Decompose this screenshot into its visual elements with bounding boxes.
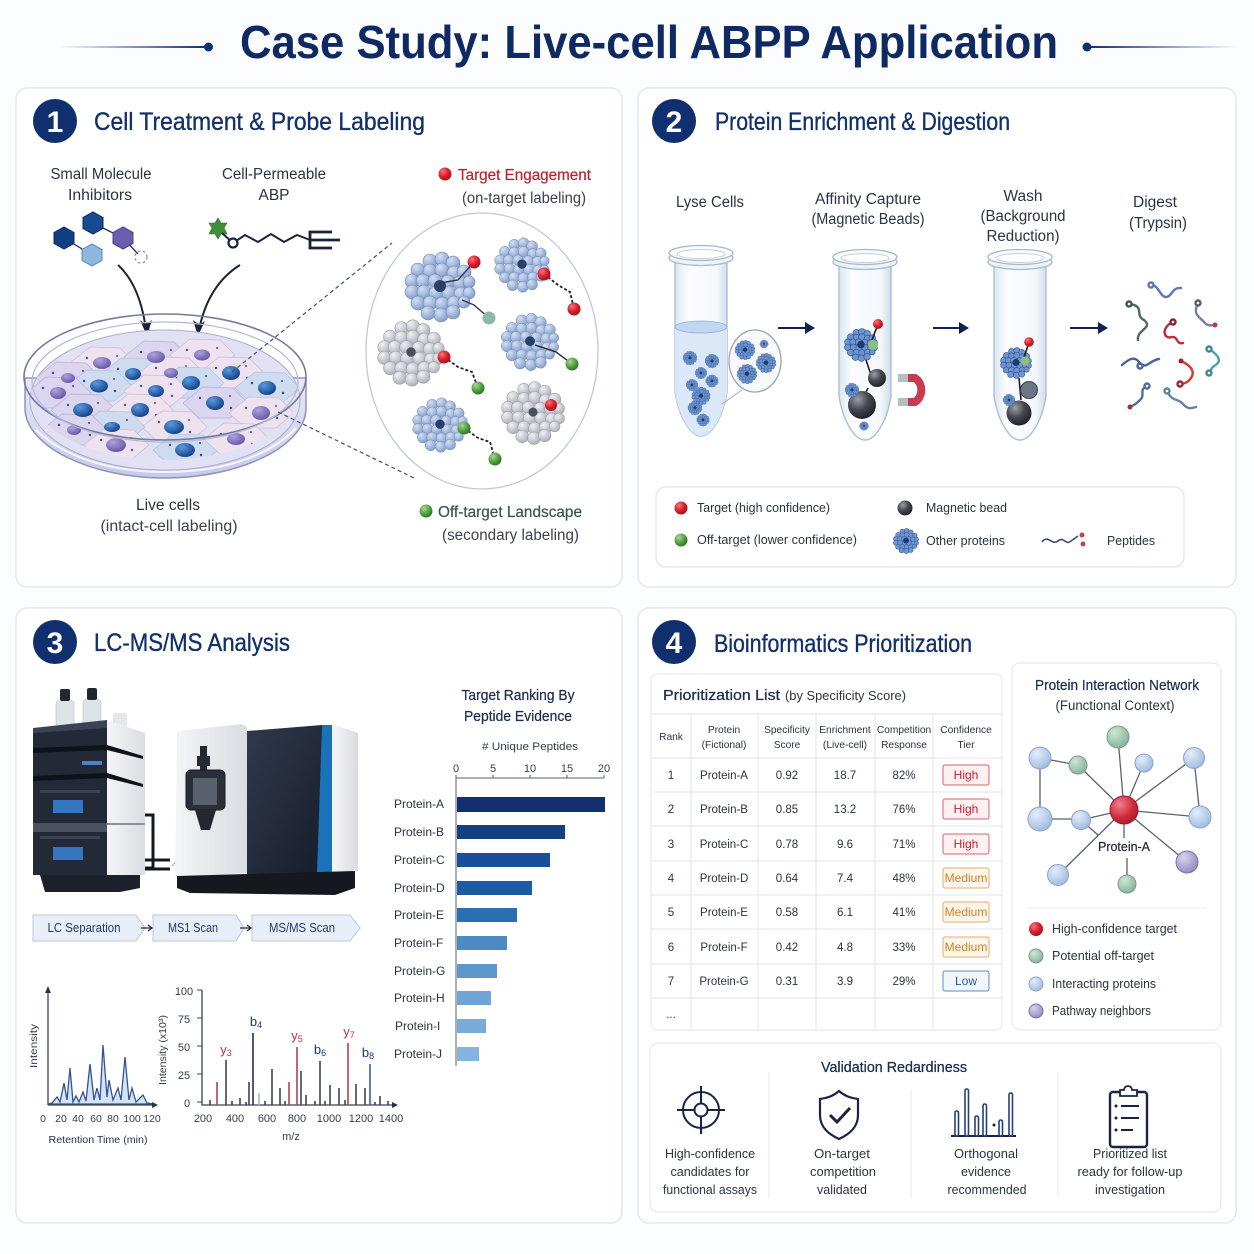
panel 4 heading [652,620,972,664]
tube 3: wash [988,250,1052,440]
row 2: 0.85 [776,804,798,816]
row 4: Protein-D [700,873,748,885]
label: small molecule inhibitors: Small Molecule [50,166,152,183]
tube 2: affinity capture [833,250,897,440]
row 3: 9.6 [837,839,853,851]
panel 2 heading: 2 [666,106,682,139]
panel 3 heading [33,620,290,664]
row 6: 6 [668,942,674,954]
network legend: Interacting proteins [1052,977,1156,991]
row 2: 13.2 [834,804,856,816]
connecting tubing [145,815,203,869]
row 4: Medium [945,871,987,885]
table: prioritization list: Rank [659,732,684,743]
network graph: Protein-A [1098,840,1151,854]
chromatogram: 100 [123,1113,141,1125]
arrow: probe to dish [193,265,240,336]
panel 1 heading: 1 [47,106,63,139]
MS/MS spectrum: 75 [178,1014,190,1026]
item: clipboard icon and text [1078,1086,1183,1197]
MS/MS spectrum: b [362,1045,369,1060]
table: prioritization list: Score [774,740,801,751]
item: clipboard icon and text: investigation [1095,1183,1165,1197]
label: cell-permeable ABP [222,166,326,204]
row 2: Protein-B [700,804,748,816]
item: shield icon and text: validated [817,1183,867,1197]
label: small molecule inhibitors: Inhibitors [68,187,132,204]
table: prioritization list: Protein [708,725,740,736]
step: LC separation: LC Separation [48,921,121,935]
legend: enrichment symbols: Off-target (lower confidence) [697,533,857,547]
MS/MS spectrum [157,986,403,1143]
title: Case Study: Live-cell ABPP Application [240,16,1058,68]
icon: magnet [898,374,921,406]
MS/MS spectrum: y [291,1028,298,1043]
MS/MS spectrum: 8 [369,1051,374,1061]
bar chart: target ranking: 20 [598,763,610,775]
table: prioritization list: (Live-cell) [823,740,867,751]
table: prioritization list [651,674,1002,1030]
item: target icon and text: candidates for [670,1165,750,1179]
MS/MS spectrum: 1200 [349,1113,373,1125]
row 4: 7.4 [837,873,854,885]
bar chart: target ranking: Protein-H [394,991,445,1005]
bar chart: target ranking: 15 [561,763,573,775]
MS/MS spectrum: 0 [184,1098,190,1110]
network graph [1028,726,1211,893]
step: LC separation [33,915,145,941]
bar chart: target ranking: Protein-B [394,825,444,839]
magnified lysate view [722,330,781,404]
step labels: Affinity Capture [815,191,921,208]
MS/MS spectrum: m/z [282,1131,300,1143]
bar chart: target ranking: 10 [524,763,536,775]
row 2 [668,799,989,819]
MS/MS spectrum: 4 [257,1020,262,1030]
item: clipboard icon and text: ready for follow-up [1078,1165,1183,1179]
network legend [1029,922,1178,1018]
chromatogram: 80 [107,1113,119,1125]
network legend: Potential off-target [1052,949,1155,963]
label: off-target landscape: Off-target Landscape [438,504,582,521]
legend: enrichment symbols: Peptides [1107,534,1155,548]
row 3: High [954,837,978,851]
panel 1 heading: Cell Treatment & Probe Labeling [94,108,425,136]
MS/MS spectrum: Intensity (x10³) [157,1015,169,1085]
item: target icon and text: functional assays [663,1183,757,1197]
row 3: 71% [892,839,916,851]
item: shield icon and text: competition [810,1165,876,1179]
arrow [141,925,152,931]
row 1: Protein-A [700,770,748,782]
icon: small molecule hexagons [54,212,147,266]
item: spectrum icon and text: Orthogonal [954,1147,1018,1161]
legend: enrichment symbols: Target (high confidence) [697,501,830,515]
bar chart: target ranking: Protein-F [394,936,443,950]
panel 3 heading: LC-MS/MS Analysis [94,629,290,657]
step labels: Wash [1003,188,1043,205]
panel 1: cell treatment and probe labeling [16,88,622,587]
MS/MS spectrum: 5 [298,1034,303,1044]
item: spectrum icon and text [948,1089,1027,1197]
item: clipboard icon and text: Prioritized list [1093,1147,1168,1161]
row 6: Protein-F [700,942,748,954]
validation readiness card [650,1043,1221,1212]
table: prioritization list: Enrichment [819,725,871,736]
MS/MS spectrum: 1400 [379,1113,403,1125]
peptides [1122,282,1219,410]
table: prioritization list: (by Specificity Score) [785,689,906,703]
row 5: 5 [668,907,674,919]
bar chart: target ranking: 5 [490,763,496,775]
item: shield icon and text: On-target [814,1147,871,1161]
row 4: 48% [892,873,916,885]
row 1: High [954,768,978,782]
arrow [240,925,251,931]
table: prioritization list: Competition [877,725,931,736]
row 7: 3.9 [837,976,853,988]
MS/MS spectrum: y [343,1024,350,1039]
MS/MS spectrum: b [314,1042,321,1057]
row 6: Medium [945,940,987,954]
MS/MS spectrum: 25 [178,1070,190,1082]
label: off-target landscape [420,504,582,544]
row 1: 82% [892,770,916,782]
row 1: 0.92 [776,770,798,782]
label: off-target landscape: (secondary labeling) [442,527,579,544]
item: spectrum icon and text: recommended [948,1183,1027,1197]
row 1: 18.7 [834,770,856,782]
tube 1: lysate [669,246,733,436]
panel 3 heading: 3 [47,627,63,660]
row 5: Medium [945,905,987,919]
item: shield icon and text [810,1091,876,1197]
lens: labeled proteins [366,213,598,489]
protein 2 [495,238,580,316]
step labels [676,188,1187,245]
network legend: Pathway neighbors [1052,1004,1151,1018]
table: prioritization list: Specificity [764,725,811,736]
icon: activity-based probe [209,218,340,248]
row 3: 0.78 [776,839,798,851]
label: live cells: (intact-cell labeling) [100,518,238,535]
chart title: Peptide Evidence [464,708,572,725]
row 5 [668,902,989,922]
MS/MS spectrum: 1000 [317,1113,341,1125]
arrow: step 3 to 4 [1070,322,1108,334]
arrow: inhibitors to dish [118,265,152,336]
row 4: 0.64 [776,873,799,885]
MS/MS spectrum: 7 [350,1030,355,1040]
protein 6 [502,382,564,444]
table: prioritization list: Tier [957,740,975,751]
validation readiness card: Validation Redardiness [821,1059,967,1076]
table: prioritization list: Response [881,740,927,751]
panel 4: bioinformatics prioritization [638,608,1236,1223]
step labels: (Magnetic Beads) [812,211,924,228]
MS/MS spectrum: 600 [258,1113,276,1125]
row 5: 6.1 [837,907,853,919]
chart title: Target Ranking By [462,687,575,704]
row 7: 29% [892,976,916,988]
row 7: 7 [668,976,674,988]
row 1 [668,765,989,785]
panel 2 heading [652,99,1010,143]
step labels: Lyse Cells [676,194,744,211]
chromatogram: 0 [40,1113,46,1125]
row 7: Low [955,974,977,988]
label: live cells [100,497,238,535]
panel 4 heading: Bioinformatics Prioritization [714,630,972,658]
MS/MS spectrum: y [220,1042,227,1057]
legend: enrichment symbols: Magnetic bead [926,501,1007,515]
row 7 [668,971,989,991]
row 7: Protein-G [699,976,749,988]
row 5: 0.58 [776,907,798,919]
bar chart: target ranking: Protein-I [395,1019,440,1033]
zoom lines from cell to lens [232,243,414,478]
MS/MS spectrum: 200 [194,1113,212,1125]
MS/MS spectrum: 3 [227,1048,232,1058]
chromatogram: 20 [55,1113,67,1125]
label: cell-permeable ABP: ABP [258,187,290,204]
legend: enrichment symbols: Other proteins [926,534,1005,548]
LC stack instrument [33,688,145,892]
bar chart: target ranking: # Unique Peptides [482,741,579,753]
label: target engagement: (on-target labeling) [462,190,586,207]
row 3: 3 [668,839,674,851]
panel 2: protein enrichment and digestion [638,88,1236,587]
protein 1 [405,252,496,324]
label: target engagement: Target Engagement [458,167,592,184]
chart title [462,687,575,725]
legend: enrichment symbols [656,487,1184,567]
row 6: 33% [892,942,916,954]
chromatogram [28,986,161,1146]
step labels: (Background [980,208,1066,225]
MS/MS spectrum: b [250,1014,257,1029]
row 6 [668,937,989,957]
panel 4 heading: 4 [666,627,683,660]
item: spectrum icon and text: evidence [961,1165,1011,1179]
bar chart: target ranking: Protein-E [394,908,444,922]
row 3: Protein-C [700,839,748,851]
item: target icon and text: High-confidence [665,1147,755,1161]
item: target icon and text [663,1086,757,1197]
network card: Protein Interaction Network [1035,678,1200,694]
row 2: High [954,802,978,816]
step labels: Reduction) [986,228,1060,245]
row 5: 41% [892,907,916,919]
MS/MS spectrum: 800 [288,1113,306,1125]
step labels: (Trypsin) [1129,215,1187,232]
chromatogram: 120 [143,1113,161,1125]
MS/MS spectrum: 6 [321,1048,326,1058]
mass spectrometer [175,724,358,895]
bar chart: target ranking: Protein-A [394,797,444,811]
petri dish with live cells [24,314,306,478]
label: cell-permeable ABP: Cell-Permeable [222,166,326,183]
bar chart: target ranking: Protein-C [394,853,445,867]
panel 2 heading: Protein Enrichment & Digestion [715,108,1010,136]
MS/MS spectrum: 100 [175,986,193,998]
chromatogram: Intensity [28,1023,40,1068]
chromatogram: Retention Time (min) [48,1134,148,1146]
step: MS/MS scan [252,915,360,941]
panel 3: LC-MS/MS analysis [16,608,622,1223]
bar chart: target ranking: Protein-G [394,964,445,978]
table: prioritization list: Confidence [940,725,992,736]
chromatogram: 40 [72,1113,84,1125]
row 1: 1 [668,770,674,782]
label: target engagement [438,167,592,207]
row 4: 4 [668,873,675,885]
panel 1 heading [33,99,425,143]
step: MS/MS scan: MS/MS Scan [269,921,335,935]
network card: (Functional Context) [1056,698,1174,713]
bar chart: target ranking: Protein-D [394,881,445,895]
row 2: 76% [892,804,916,816]
step: MS1 scan: MS1 Scan [168,921,218,935]
table: prioritization list: (Fictional) [702,740,746,751]
network card [1012,663,1221,1030]
bar chart: target ranking: 0 [453,763,459,775]
arrow: step 2 to 3 [933,322,969,334]
label: live cells: Live cells [136,497,200,514]
protein 4 [501,313,578,371]
workflow chevrons [33,915,360,941]
arrow: step 1 to 2 [778,322,815,334]
row 5: Protein-E [700,907,748,919]
table: prioritization list: ... [666,1009,676,1021]
protein 3 [378,320,484,394]
network legend: High-confidence target [1052,922,1178,936]
row 6: 0.42 [776,942,798,954]
MS/MS spectrum: 50 [178,1042,190,1054]
row 7: 0.31 [776,976,798,988]
bar chart: target ranking [394,687,610,1066]
label: small molecule inhibitors [50,166,152,204]
row 6: 4.8 [837,942,853,954]
step: MS1 scan [153,915,244,941]
protein 5 [413,398,502,466]
step labels: Digest [1133,194,1178,211]
row 3 [668,834,989,854]
MS/MS spectrum: 400 [226,1113,244,1125]
bar chart: target ranking: Protein-J [394,1047,442,1061]
row 4 [668,868,989,888]
chromatogram: 60 [90,1113,102,1125]
row 2: 2 [668,804,674,816]
table: prioritization list: Prioritization List [663,687,781,704]
